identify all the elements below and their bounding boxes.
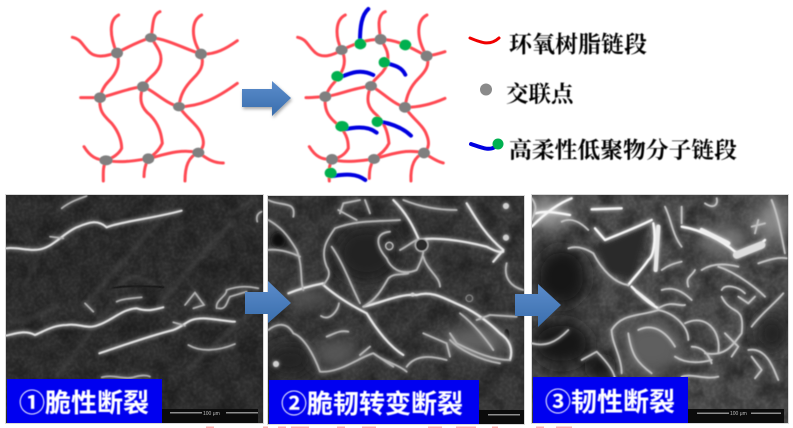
- scale bar: [162, 409, 258, 423]
- label: brittle fracture: [7, 379, 162, 423]
- scale bar: 100 μm: [730, 411, 747, 417]
- arrow: second transition: [515, 284, 561, 327]
- label: brittle fracture: ①脆性断裂: [19, 388, 149, 418]
- legend: flexible oligomer segment: 高柔性低聚物分子链段: [509, 138, 737, 163]
- scale bar: 100 μm: [203, 411, 220, 417]
- scale bar: [479, 410, 524, 424]
- scale bar: [688, 409, 784, 423]
- label: ductile fracture: ③韧性断裂: [545, 387, 675, 417]
- label: brittle-ductile transition: [269, 380, 479, 424]
- arrow: first transition: [245, 281, 291, 323]
- panel: ductile fracture micrograph: [528, 194, 789, 424]
- legend: epoxy segment: 环氧树脂链段: [509, 32, 647, 57]
- diagram: epoxy network before modification: [72, 12, 237, 181]
- label: ductile fracture: [533, 377, 688, 423]
- diagram: toughened network with flexible oligomer segments: [298, 9, 445, 181]
- legend: crosslink point: 交联点: [506, 82, 575, 107]
- panel: brittle fracture micrograph: [5, 194, 264, 424]
- arrow: modification step: [242, 81, 291, 116]
- label: brittle-ductile transition: ②脆韧转变断裂: [281, 389, 463, 419]
- panel: brittle-ductile transition fracture micrograph: [267, 195, 525, 425]
